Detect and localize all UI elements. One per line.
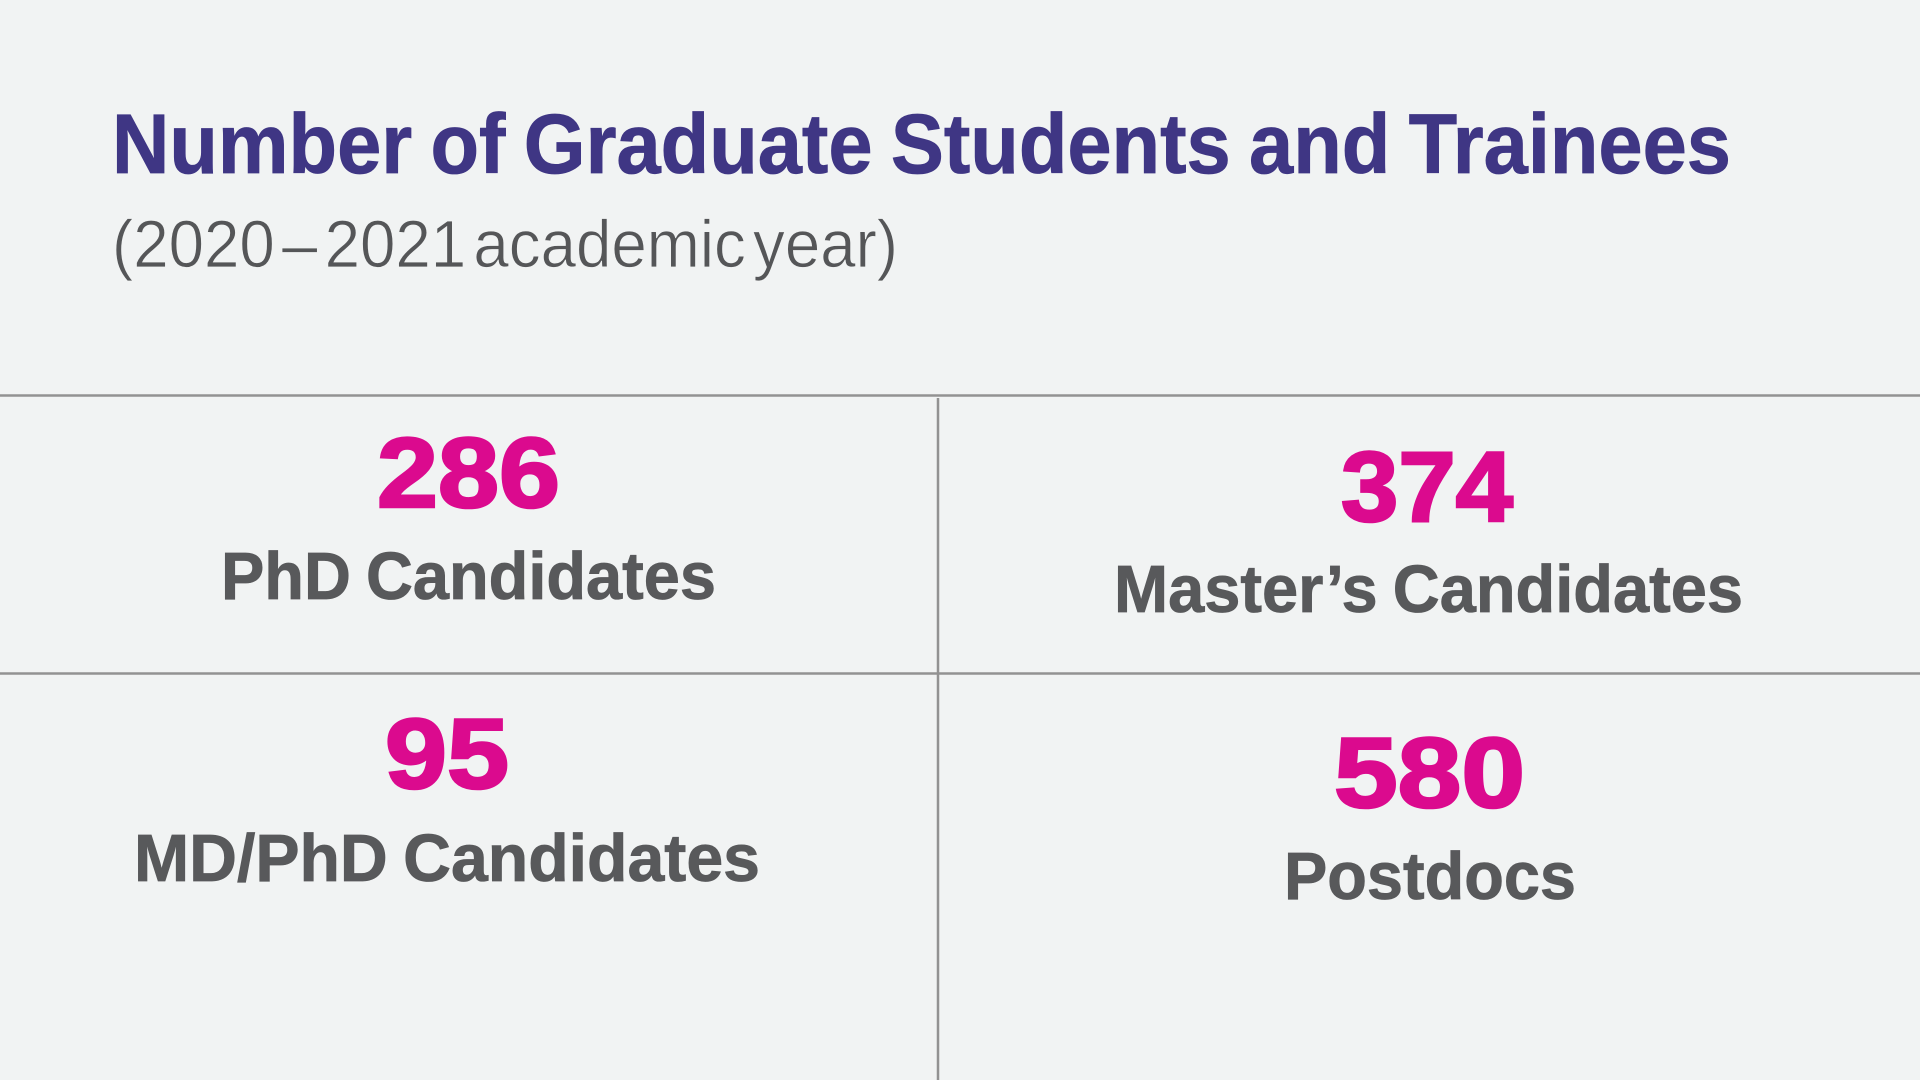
number: 374: 374 [1341, 431, 1513, 542]
label: MD/PhD Candidates: MD/PhD Candidates [134, 821, 760, 896]
number: 580: 580 [1334, 717, 1525, 828]
panel: Master's candidates [1114, 431, 1743, 627]
label: Master's Candidates: Master’s Candidates [1114, 552, 1743, 627]
panel: Postdocs [1284, 717, 1576, 914]
label: Postdocs: Postdocs [1284, 839, 1576, 914]
label: PhD Candidates: PhD Candidates [221, 539, 716, 614]
number: 95: 95 [385, 698, 509, 809]
number: 286: 286 [377, 417, 560, 528]
panel: MD/PhD candidates [134, 698, 760, 896]
subtitle: (2020 – 2021 academic year) [112, 207, 898, 282]
title: Number of Graduate Students and Trainees [112, 97, 1731, 191]
panel: PhD candidates [221, 417, 716, 614]
